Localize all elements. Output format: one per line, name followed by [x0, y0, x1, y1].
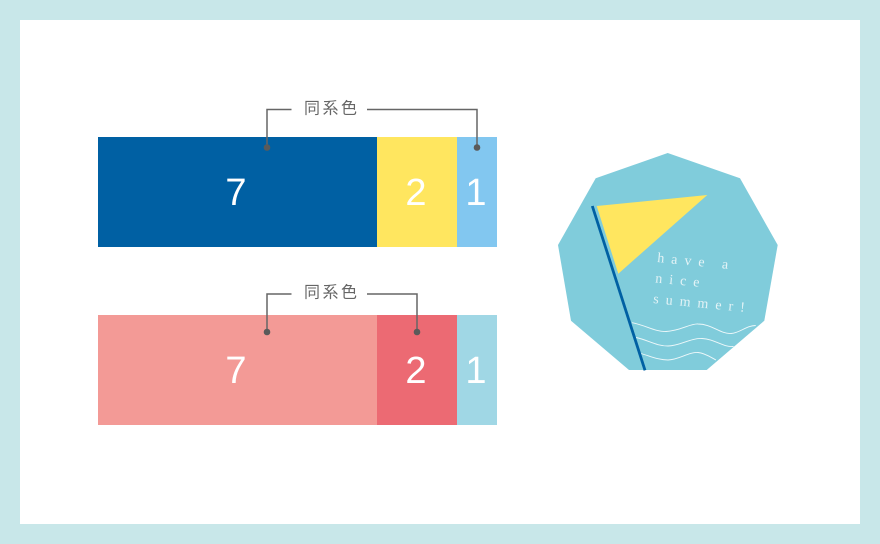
- callout: bottom same-hue bracket: [264, 284, 420, 335]
- segment 7 salmon: [98, 315, 377, 425]
- segment 7 salmon: 7: [225, 350, 247, 392]
- callout: top same-hue bracket: [264, 100, 480, 151]
- icon: yellow flag: [597, 195, 707, 274]
- waves: [632, 323, 756, 360]
- segment 1 light blue: 1: [465, 172, 487, 214]
- callout: top same-hue bracket: 同系色: [304, 100, 360, 118]
- message text: summer!: [653, 292, 752, 316]
- message text: nice: [655, 272, 707, 291]
- panel: bottom proportion bar: [98, 315, 497, 425]
- callout: bottom same-hue bracket: 同系色: [304, 284, 360, 302]
- segment 7 dark blue: [98, 137, 377, 247]
- message text: [653, 251, 752, 316]
- segment 2 yellow: [377, 137, 457, 247]
- segment 7 dark blue: 7: [225, 172, 247, 214]
- segment 2 red: 2: [405, 350, 427, 392]
- nonagon background: [558, 153, 778, 370]
- segment 1 pale blue: 1: [465, 350, 487, 392]
- message text: have a: [657, 251, 736, 273]
- segment 1 pale blue: [457, 315, 497, 425]
- panel: top proportion bar: [98, 137, 497, 247]
- segment 2 red: [377, 315, 457, 425]
- segment 1 light blue: [457, 137, 497, 247]
- icon: flag pole: [592, 206, 645, 370]
- segment 2 yellow: 2: [405, 172, 427, 214]
- badge: summer flag nonagon: [558, 153, 778, 370]
